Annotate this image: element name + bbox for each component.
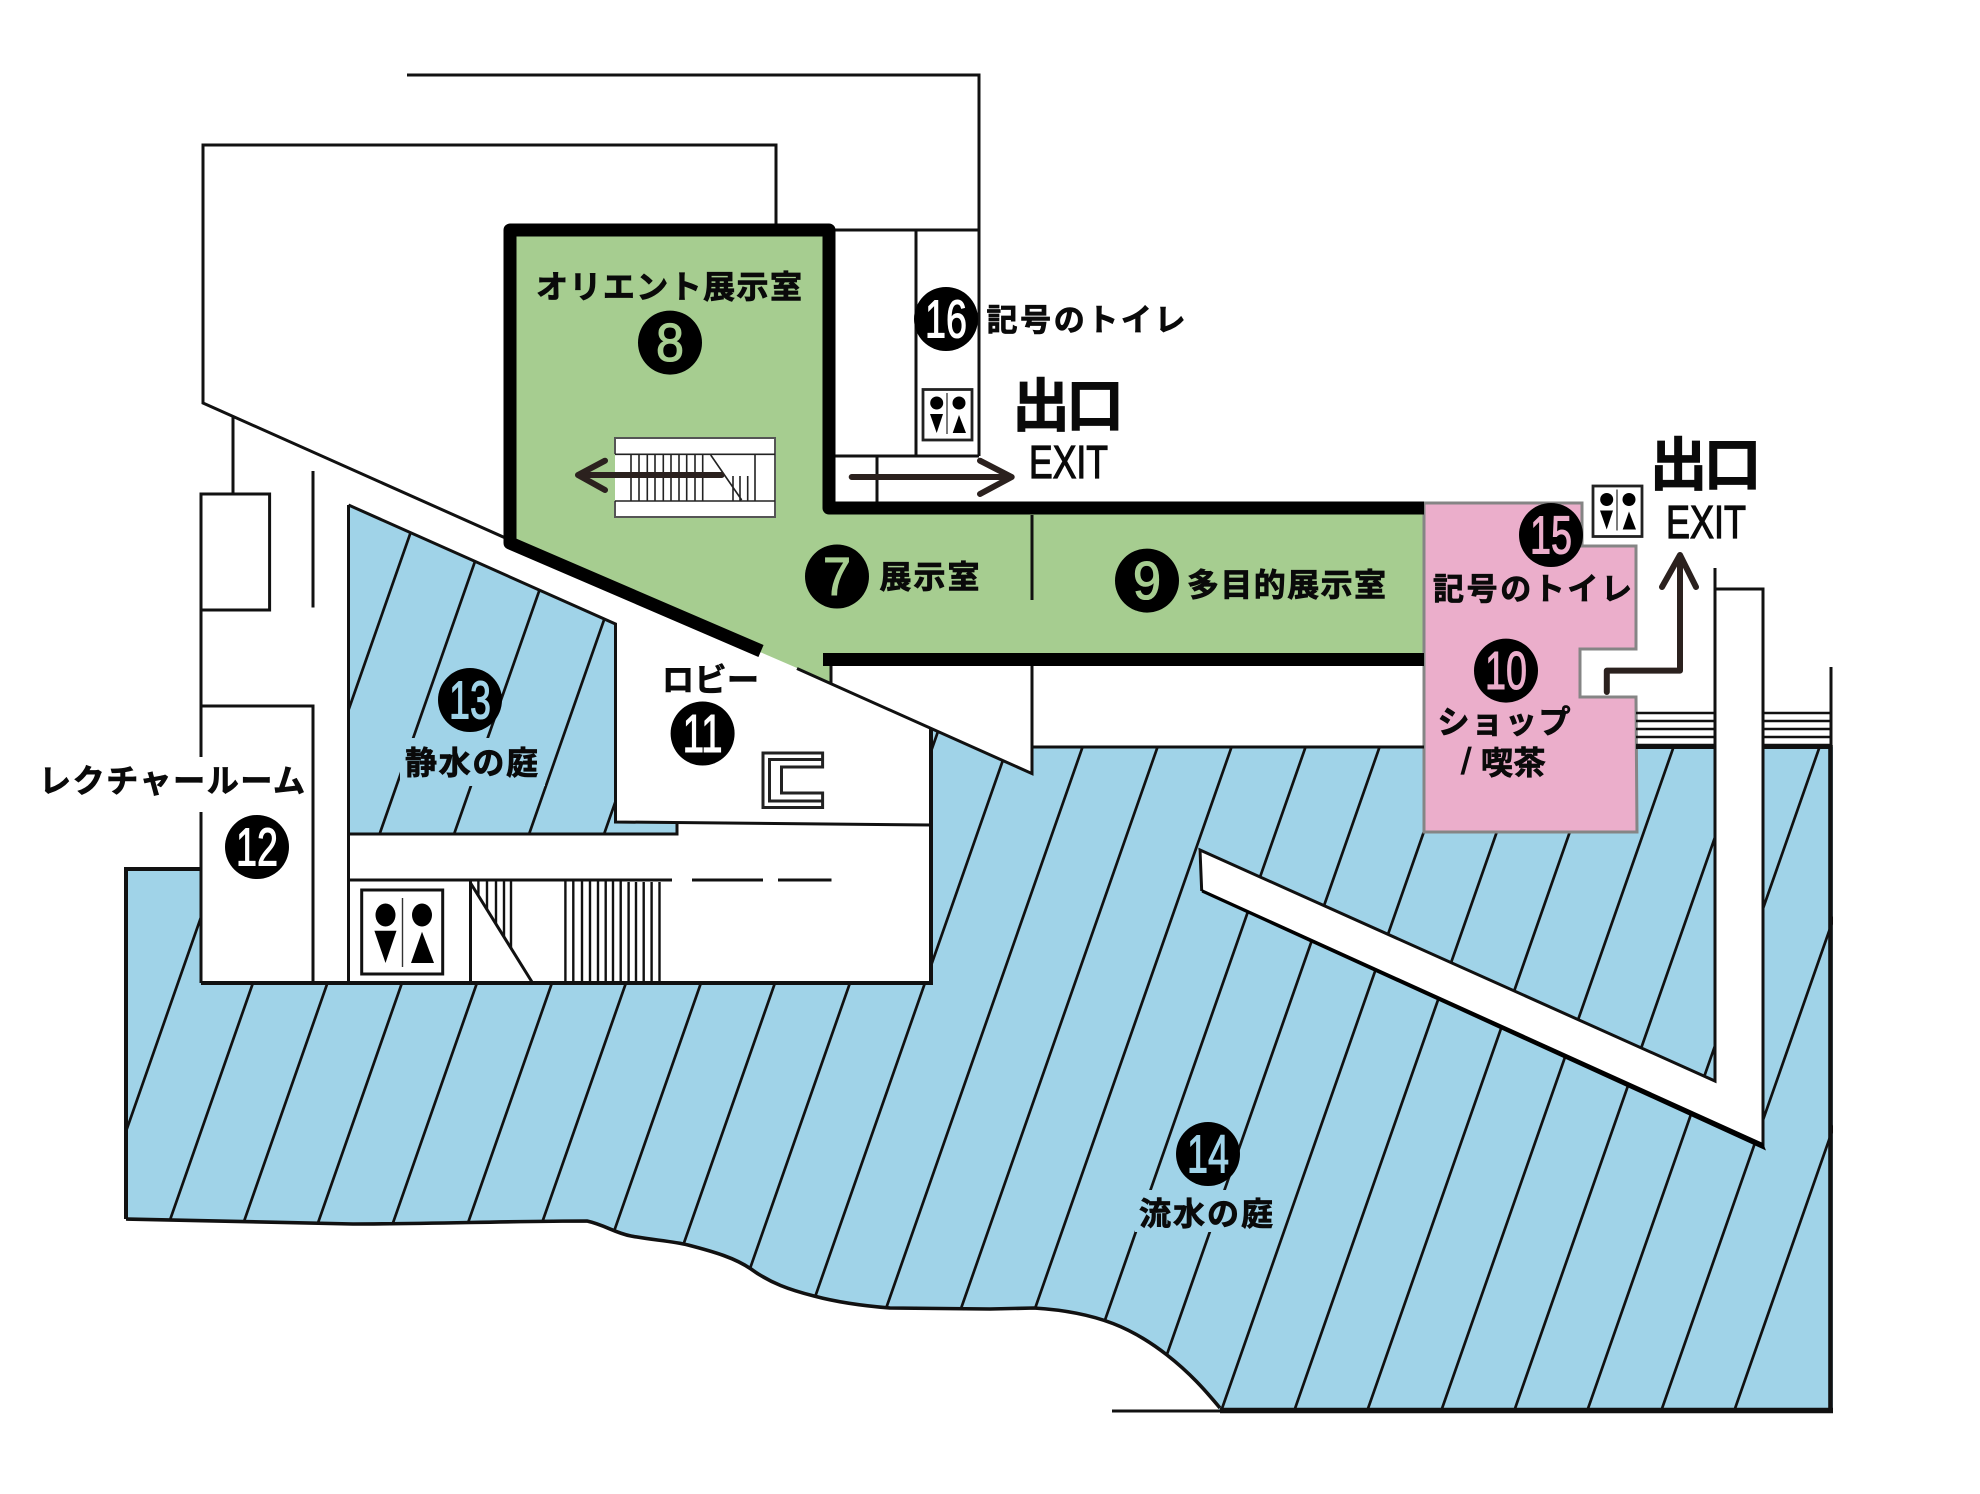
label: lecture room	[36, 757, 310, 812]
marker 8: 8	[656, 313, 684, 373]
icon: restroom by toilet 15	[1593, 486, 1642, 536]
long stairs	[565, 880, 660, 982]
green exhibition area	[510, 230, 1424, 683]
arrow: second exit	[1607, 555, 1696, 692]
pink shop area	[1424, 503, 1637, 832]
marker 13: 13	[449, 670, 491, 730]
staircase in exhibition room	[615, 438, 775, 517]
label: shop: ショップ	[1438, 704, 1570, 740]
marker 9: 9	[1133, 551, 1161, 611]
marker 16: 16	[925, 290, 967, 350]
label: orient room: オリエント展示室	[536, 269, 802, 305]
icon: escalator in lobby	[763, 753, 823, 808]
label: exhibition room: 展示室	[880, 559, 980, 595]
garden 14 water area	[128, 731, 1833, 1410]
icon: restroom by toilet 16	[923, 390, 972, 440]
arrow: first exit	[852, 461, 1012, 494]
marker 7	[805, 544, 869, 608]
label: still water garden	[400, 738, 545, 786]
label: cafe: / 喫茶	[1461, 741, 1546, 782]
label: lecture room: レクチャールーム	[39, 763, 305, 799]
thick walls of exhibition area	[510, 230, 1424, 660]
label: flowing water garden: 流水の庭	[1139, 1196, 1273, 1232]
label: toilet 16: 記号のトイレ	[986, 303, 1186, 338]
icon: large restroom	[362, 890, 443, 974]
marker 10: 10	[1485, 641, 1527, 701]
arrow: stairs to left	[578, 461, 722, 490]
short stairs near restroom	[470, 880, 532, 983]
marker 8	[638, 311, 702, 375]
label: lobby: ロビー	[662, 662, 759, 698]
label: first exit: EXIT	[1029, 436, 1108, 488]
label: second exit	[1650, 433, 1762, 548]
building outlines	[126, 75, 1833, 1412]
marker 15: 15	[1530, 506, 1572, 566]
horizontal steps right of shop	[1636, 713, 1831, 745]
label: multipurpose room: 多目的展示室	[1187, 567, 1386, 603]
label: first exit: 出口	[1012, 374, 1124, 439]
label: still water garden: 静水の庭	[405, 745, 538, 781]
marker 9	[1115, 549, 1179, 613]
marker 7: 7	[823, 547, 851, 607]
label: second exit: 出口	[1650, 433, 1762, 498]
marker 11: 11	[683, 704, 723, 764]
garden 13 water area	[350, 507, 676, 832]
label: toilet 15: 記号のトイレ	[1433, 572, 1632, 607]
label: second exit: EXIT	[1666, 496, 1746, 548]
label: first exit	[1012, 374, 1124, 488]
marker 12: 12	[236, 818, 278, 878]
marker 14: 14	[1187, 1124, 1229, 1184]
